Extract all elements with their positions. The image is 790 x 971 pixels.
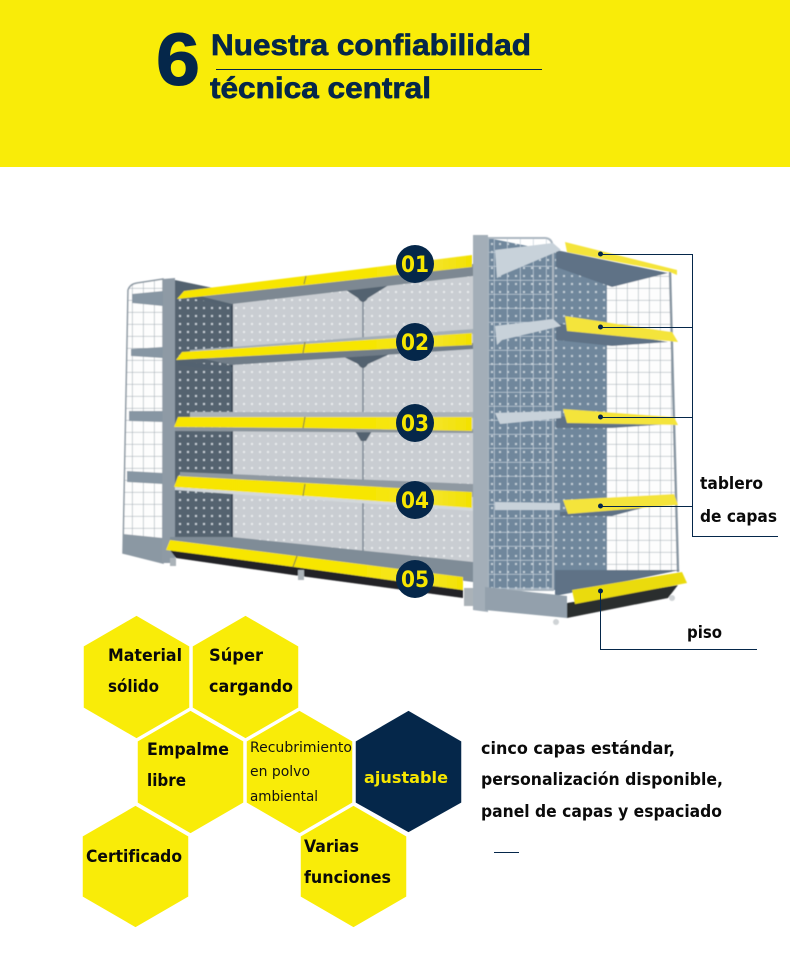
right shelf undersides [555,250,680,596]
badge 04: 04 [401,489,429,514]
right base [485,587,567,618]
hexagon: certified: Certificado [86,847,182,867]
badge 05: 05 [401,568,429,593]
hexagon: coating: ambiental [250,789,318,805]
hexagon: functions [300,805,407,928]
badge 02: 02 [401,331,429,356]
hexagon: functions: Varias [304,837,359,857]
hexagon: material: Material [108,646,182,666]
shelf 1 to 5 undersides and surfaces [170,264,473,598]
badge 03 [396,404,434,442]
badge 01: 01 [401,253,429,278]
left dark panel [173,280,232,540]
badge 03: 03 [401,412,429,437]
badge 04 [396,481,434,519]
hexagon: adjustable: ajustable [364,768,448,787]
hexagon: material: sólido [108,677,159,697]
hexagon: coating [246,710,353,834]
hexagon: coating: Recubrimiento [250,740,352,756]
hexagon features [82,615,462,928]
badge 05 [396,560,434,598]
hexagon: adjustable [355,710,462,833]
shelf joints [293,276,306,567]
hexagon: load: Súper [209,646,264,666]
yellow shelf fronts, main bay [166,255,472,590]
right blue panel [488,238,607,590]
back panel [232,272,473,566]
hexagon: coating: en polvo [250,764,310,780]
right white mesh [607,272,677,572]
section number: 6 [156,18,200,101]
header band [0,0,790,167]
hexagon: load: cargando [209,677,293,697]
panel seam [362,290,364,552]
wire door [488,238,561,590]
hexagon: splice: libre [147,771,186,791]
shelving unit illustration [123,235,687,625]
description text [481,739,723,822]
label: floor: piso [687,623,722,643]
right post [670,272,678,572]
title: Nuestra confiabilidad [211,29,531,62]
hexagon: load [192,615,299,739]
label: layer board: tablero [700,474,763,494]
leader: floor [598,588,757,650]
description text: cinco capas estándar, [481,739,675,759]
leader: layer board [598,252,778,536]
title: técnica central [210,72,431,105]
short accent line [494,852,519,853]
badge 02 [396,323,434,361]
title [210,29,542,105]
description text: personalización disponible, [481,770,723,790]
left upright [162,278,175,563]
hexagon: functions: funciones [304,868,391,888]
description text: panel de capas y espaciado [481,802,722,822]
left end mesh [123,279,163,563]
hexagon: certified [82,805,189,928]
right yellow shelf fronts [563,242,678,514]
hexagon: splice: Empalme [147,740,229,760]
number badges [396,245,434,598]
right floor shadow [567,585,678,618]
hexagon: splice [137,710,244,834]
hexagon: material [83,615,190,739]
label: layer board: de capas [700,507,777,527]
badge 01 [396,245,434,283]
feet [170,558,474,606]
label: layer board [700,474,777,527]
right upright [473,235,488,612]
brackets [175,280,392,441]
